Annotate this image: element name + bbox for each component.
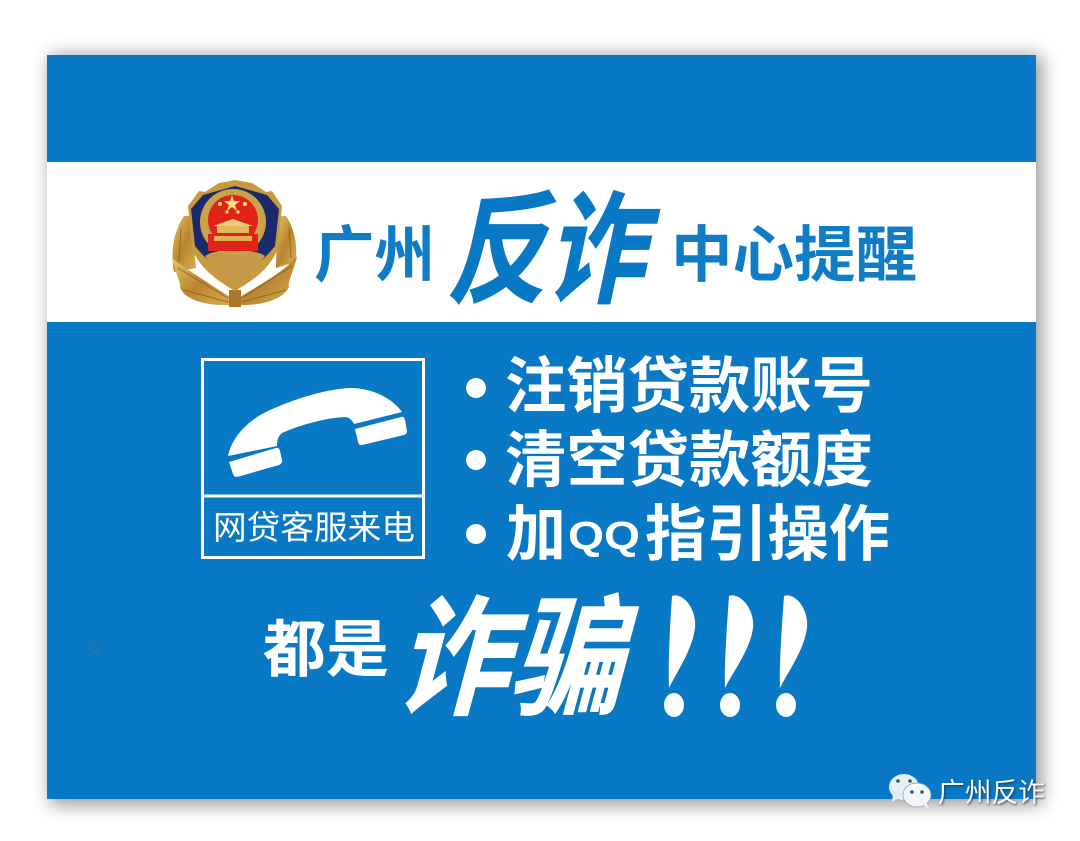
panel frame bbox=[202, 360, 424, 558]
icon: telephone handset bbox=[228, 388, 407, 477]
bullet: 清空贷款额度: 清空贷款额度 bbox=[505, 426, 873, 494]
bullet: 注销贷款账号: 注销贷款账号 bbox=[505, 352, 873, 420]
label: 网贷客服来电: 网贷客服来电 bbox=[213, 509, 415, 546]
text: brush 诈骗: 诈骗 bbox=[387, 587, 652, 732]
bullet: 加QQ指引操作: 加 bbox=[506, 500, 566, 568]
heading: brush 反诈: 反诈 bbox=[441, 183, 668, 320]
watermark: WeChat account bbox=[889, 774, 1045, 809]
heading: 中心提醒: 中心提醒 bbox=[671, 221, 917, 289]
panel: white title band bbox=[47, 162, 1036, 322]
heading: 广州: 广州 bbox=[314, 221, 435, 289]
icon panel: incoming call from loan customer service bbox=[202, 360, 424, 558]
bullet: 加QQ指引操作: QQ bbox=[568, 514, 640, 558]
icon: small speck bbox=[89, 645, 97, 653]
text: 都是: 都是 bbox=[263, 616, 389, 685]
text: brush exclamation marks bbox=[664, 595, 807, 717]
bullet: 加QQ指引操作 bbox=[466, 500, 890, 568]
icon: WeChat bubbles bbox=[889, 774, 931, 809]
label: 广州反诈: 广州反诈 bbox=[938, 778, 1045, 808]
divider bbox=[203, 494, 423, 498]
bullet: 加QQ指引操作: 指引操作 bbox=[645, 500, 890, 568]
icon: police emblem bbox=[172, 180, 297, 307]
bullet list bbox=[466, 352, 890, 568]
